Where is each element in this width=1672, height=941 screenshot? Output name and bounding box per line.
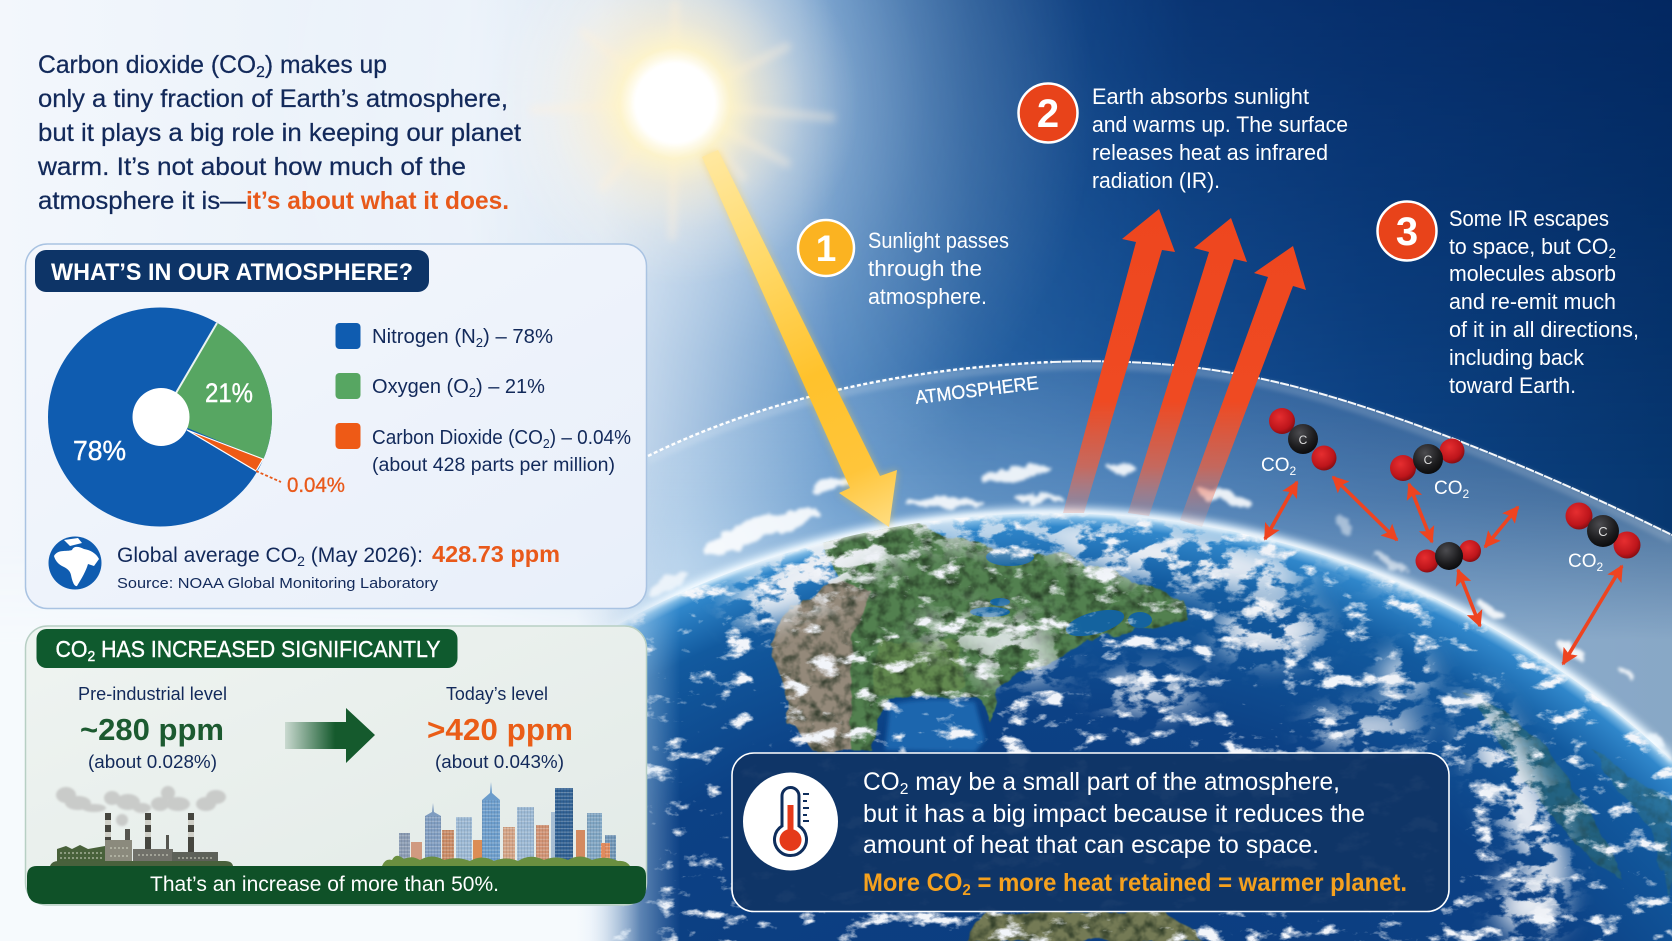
CO2 molecule 2: 2 <box>1462 487 1470 501</box>
CO2 molecule 2: CO <box>1434 478 1462 499</box>
pre-industrial level: ~280 ppm <box>80 712 224 747</box>
pie chart: 0.04% <box>287 474 345 497</box>
CO2 molecule 2: C <box>1424 453 1433 467</box>
CO2 molecule 4: C <box>1598 524 1608 539</box>
global average CO2 reading: Global average CO <box>117 544 297 567</box>
pie chart: 21% <box>205 378 253 408</box>
CO2 molecule 1: CO <box>1261 455 1290 476</box>
pre-industrial level: Pre-industrial level <box>78 684 227 704</box>
today's level: >420 ppm <box>427 712 573 747</box>
step 3 badge and text: including back <box>1449 345 1585 370</box>
icon: thermometer <box>743 772 838 870</box>
panel: CO2 has increased significantly <box>26 626 646 905</box>
global average CO2 reading: 428.73 ppm <box>432 541 560 567</box>
step 2 badge and text <box>1018 84 1348 193</box>
callout text: 2 <box>962 882 971 899</box>
step 3 badge and text: 2 <box>1608 245 1616 261</box>
today's level: (about 0.043%) <box>435 752 564 772</box>
CO2 molecule 4: 2 <box>1596 560 1604 574</box>
today's level: Today’s level <box>446 684 548 704</box>
callout text: = more heat retained = warmer planet. <box>971 869 1407 897</box>
legend: (about 428 parts per million) <box>372 455 615 476</box>
legend: Oxygen (O <box>372 376 469 398</box>
atmosphere shell <box>644 360 1672 761</box>
callout text <box>863 768 1407 899</box>
re-emission double arrows <box>1265 477 1622 664</box>
panel heading <box>36 629 458 668</box>
callout text: but it has a big impact because it reduces the <box>863 800 1365 828</box>
intro text: ) makes up <box>265 51 387 79</box>
step 2 badge and text: releases heat as infrared <box>1092 140 1328 165</box>
legend: ) – 21% <box>476 376 545 398</box>
CO2 molecule 2 <box>1390 438 1470 501</box>
step 3 badge and text: toward Earth. <box>1449 373 1576 398</box>
summary bar <box>27 866 646 904</box>
intro text: Carbon dioxide (CO <box>38 51 259 79</box>
panel heading: WHAT’S IN OUR ATMOSPHERE? <box>51 259 413 286</box>
panel heading: HAS INCREASED SIGNIFICANTLY <box>95 636 440 662</box>
legend: Nitrogen (N <box>372 326 474 348</box>
step 3 badge and text: 3 <box>1396 210 1418 254</box>
global average CO2 reading: Source: NOAA Global Monitoring Laboratory <box>117 575 439 592</box>
summary bar: That’s an increase of more than 50%. <box>150 873 499 896</box>
step 3 badge and text: molecules absorb <box>1449 261 1616 286</box>
panel heading: 2 <box>87 648 95 665</box>
intro text: it’s about what it does. <box>246 187 509 215</box>
callout text: 2 <box>900 781 909 798</box>
lakes and bays <box>885 548 1152 752</box>
intro text: warm. It’s not about how much of the <box>37 153 466 181</box>
IR arrows rising from Earth <box>1063 209 1306 527</box>
step 1 badge and text: Sunlight passes <box>868 228 1009 253</box>
legend: 2 <box>469 385 476 400</box>
step 1 badge and text <box>798 220 1009 309</box>
CO2 molecule 3 <box>1416 540 1481 572</box>
panel: what's in our atmosphere <box>26 229 646 608</box>
pie chart <box>48 308 344 526</box>
legend: ) – 78% <box>483 326 553 348</box>
step 2 badge and text: radiation (IR). <box>1092 168 1220 193</box>
earth clouds <box>600 500 1672 941</box>
step 1 badge and text: atmosphere. <box>868 284 987 309</box>
CO2 molecule 4: CO <box>1568 551 1596 572</box>
callout text: CO <box>863 768 900 796</box>
legend: 2 <box>476 335 483 350</box>
step 3 badge and text: to space, but CO <box>1449 234 1614 259</box>
callout text: may be a small part of the atmosphere, <box>908 768 1340 796</box>
step 3 badge and text: and re-emit much <box>1449 289 1616 314</box>
atmosphere label: ATMOSPHERE <box>914 373 1040 409</box>
legend: Carbon Dioxide (CO <box>372 427 552 449</box>
icon: factory <box>50 786 233 866</box>
white page fade at lower left <box>215 609 636 941</box>
sun <box>490 0 860 288</box>
CO2 molecule 1: 2 <box>1290 464 1296 478</box>
sunlight arrow <box>702 150 897 527</box>
legend: 2 <box>543 436 550 451</box>
pre-industrial level: (about 0.028%) <box>88 752 217 772</box>
intro text <box>37 51 521 215</box>
icon: city skyline <box>382 782 630 866</box>
CO2 molecule 1 <box>1261 408 1336 478</box>
pre-industrial level <box>78 684 227 772</box>
CO2 molecule 1: C <box>1299 433 1308 447</box>
step 2 badge and text: and warms up. The surface <box>1092 112 1348 137</box>
clouds above the horizon <box>645 461 1666 750</box>
earth globe <box>560 500 1672 941</box>
North America landmass <box>768 520 1672 941</box>
legend <box>336 323 631 476</box>
step 2 badge and text: Earth absorbs sunlight <box>1092 84 1309 109</box>
intro text: 2 <box>256 64 265 81</box>
step 3 badge and text <box>1378 202 1639 398</box>
callout text: More CO <box>863 869 967 897</box>
intro text: but it plays a big role in keeping our planet <box>38 119 521 147</box>
panel heading: CO <box>56 636 90 662</box>
step 1 badge and text: through the <box>868 256 982 281</box>
arrow: increase <box>285 708 375 763</box>
pie chart: 78% <box>73 435 126 466</box>
step 1 badge and text: 1 <box>816 228 836 269</box>
step 3 badge and text: of it in all directions, <box>1449 317 1639 342</box>
intro text: only a tiny fraction of Earth’s atmosphere, <box>38 85 508 113</box>
global average CO2 reading <box>117 541 560 592</box>
today's level <box>427 684 573 772</box>
CO2 molecule 4 <box>1566 502 1640 574</box>
callout text: amount of heat that can escape to space. <box>863 831 1319 859</box>
atmosphere dotted boundary <box>648 361 1672 535</box>
global average CO2 reading: 2 <box>297 553 305 569</box>
global average CO2 reading: (May 2026): <box>305 544 423 567</box>
panel heading <box>35 250 429 292</box>
callout: big impact <box>732 753 1449 912</box>
step 3 badge and text: Some IR escapes <box>1449 206 1609 231</box>
step 2 badge and text: 2 <box>1037 92 1059 136</box>
intro text: atmosphere it is— <box>38 187 246 215</box>
icon: globe <box>48 536 102 590</box>
legend: ) – 0.04% <box>550 427 631 449</box>
